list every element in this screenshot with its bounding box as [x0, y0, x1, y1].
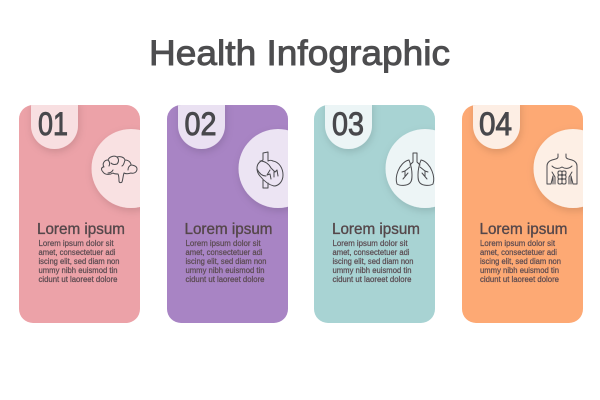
panel: card 03 lungs: [314, 105, 435, 323]
body 03: cidunt ut laoreet dolore: [332, 274, 412, 284]
body 02: amet, consectetuer adi: [186, 247, 263, 257]
body 04: cidunt ut laoreet dolore: [480, 274, 559, 284]
icon: heart: [257, 152, 283, 188]
body 03: amet, consectetuer adi: [332, 247, 410, 257]
heading 03: Lorem ipsum: [332, 221, 420, 238]
body 02: [186, 238, 267, 284]
body 02: ummy nibh euismod tin: [186, 265, 265, 275]
number tab 01: [31, 100, 78, 149]
number 02: 02: [184, 106, 216, 142]
panel: card 02 heart: [167, 105, 288, 323]
body 01: ummy nibh euismod tin: [38, 265, 118, 275]
body 01: Lorem ipsum dolor sit: [38, 238, 114, 248]
body 02: Lorem ipsum dolor sit: [186, 238, 261, 248]
title: Health Infographic: [149, 34, 450, 73]
number tab 03: [325, 100, 372, 149]
icon: lungs: [396, 153, 434, 185]
body 01: [38, 238, 120, 284]
number 04: 04: [479, 106, 512, 142]
body 01: amet, consectetuer adi: [38, 247, 116, 257]
body 03: [332, 238, 414, 284]
number 03: 03: [332, 106, 364, 142]
body 04: ummy nibh euismod tin: [480, 265, 559, 275]
body 01: cidunt ut laoreet dolore: [38, 274, 118, 284]
number 01: 01: [38, 106, 68, 142]
body 04: iscing elit, sed diam non: [480, 256, 561, 266]
icon: brain: [102, 156, 137, 183]
panel: card 04 torso: [462, 105, 583, 323]
icon circle 02: [238, 129, 288, 212]
body 04: Lorem ipsum dolor sit: [480, 238, 556, 248]
body 04: [480, 238, 561, 284]
number tab 02: [178, 100, 225, 149]
panel: card 01 brain: [19, 105, 140, 323]
body 04: amet, consectetuer adi: [480, 247, 557, 257]
icon circle 03: [385, 129, 435, 212]
heading 01: Lorem ipsum: [37, 221, 125, 238]
body 02: iscing elit, sed diam non: [186, 256, 267, 266]
icon circle 01: [90, 129, 140, 213]
number tab 04: [473, 100, 520, 149]
body 03: iscing elit, sed diam non: [332, 256, 414, 266]
icon: torso: [547, 154, 577, 184]
icon circle 04: [532, 129, 583, 214]
body 01: iscing elit, sed diam non: [38, 256, 120, 266]
body 03: ummy nibh euismod tin: [332, 265, 412, 275]
heading 04: Lorem ipsum: [480, 221, 568, 238]
body 02: cidunt ut laoreet dolore: [186, 274, 265, 284]
body 03: Lorem ipsum dolor sit: [332, 238, 408, 248]
heading 02: Lorem ipsum: [184, 221, 272, 238]
